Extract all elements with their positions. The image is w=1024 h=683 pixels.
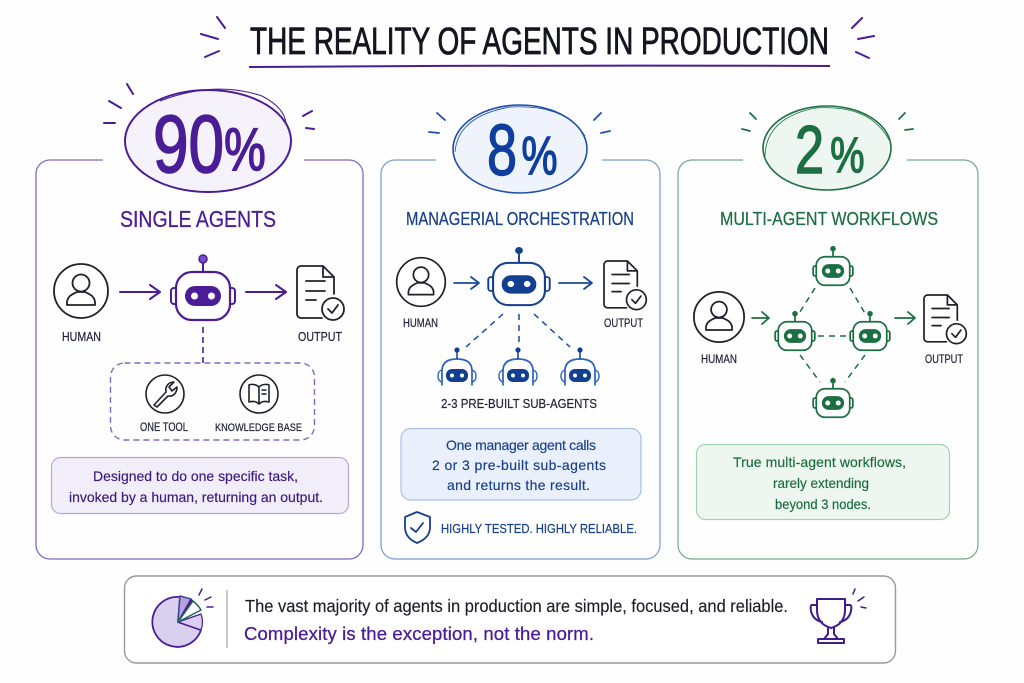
arrow [454,277,479,289]
tools group [110,363,314,440]
panel: single agents [36,84,363,559]
heading: MULTI-AGENT WORKFLOWS [720,208,938,229]
sub-agent robots [438,347,599,385]
stat: 90%: 90 [153,97,224,190]
icon: robot bottom [813,378,853,417]
icon: sub-agent 1 [438,347,476,385]
label: output: OUTPUT [298,330,342,344]
icon: trophy [811,589,866,643]
stat: 90% [125,89,291,192]
title accent ticks [201,17,874,58]
stat: 90%: % [224,116,266,183]
label: knowledge base: KNOWLEDGE BASE [215,422,302,434]
callout [696,444,950,520]
icon: robot right [850,311,890,350]
stat ticks [429,113,610,133]
divider [226,590,228,648]
title: THE REALITY OF AGENTS IN PRODUCTION [250,21,829,63]
icon: human [54,264,108,318]
arrow [559,277,592,289]
dashed connector [202,327,204,363]
icon: human [397,258,445,306]
stat: 2%: % [830,128,865,183]
icon: output document [924,295,966,344]
callout [52,458,348,514]
callout: True multi-agent workflows, [733,454,906,470]
icon: robot top [813,246,853,285]
icon: robot left [775,311,815,350]
panel: managerial orchestration [381,105,660,559]
summary emphasis: Complexity is the exception, not the norm. [244,623,594,644]
callout: beyond 3 nodes. [775,497,871,512]
reliability note: HIGHLY TESTED. HIGHLY RELIABLE. [441,521,637,536]
label: output: OUTPUT [604,318,643,330]
icon: sub-agent 2 [499,347,537,385]
callout [401,428,641,500]
arrow [895,312,915,324]
callout: 2 or 3 pre-built sub-agents [432,457,606,473]
stat: 8%: 8 [487,111,517,191]
arrow [246,285,286,299]
arrow [120,285,160,299]
stat ticks [742,113,913,131]
heading: MANAGERIAL ORCHESTRATION [406,208,634,229]
callout: One manager agent calls [446,437,596,453]
label: one tool: ONE TOOL [140,422,188,434]
robot network [775,246,890,417]
stat: 2% [763,106,891,190]
stat ticks [104,84,314,129]
stat: 8% [453,105,587,193]
icon: book [240,375,278,413]
heading: SINGLE AGENTS [120,206,276,232]
icon: output document [297,266,344,320]
icon: human [694,292,744,342]
icon: output document [604,261,646,310]
dashed network links [798,288,866,382]
callout: invoked by a human, returning an output. [69,489,323,505]
stat: 8%: % [522,126,558,186]
callout: and returns the result. [447,477,590,493]
callout: Designed to do one specific task, [93,468,298,484]
callout: rarely extending [773,476,869,491]
label: output: OUTPUT [925,354,963,366]
icon: pie chart [152,589,213,647]
icon: robot [171,255,235,320]
label: human: HUMAN [701,354,737,366]
label: human: HUMAN [403,318,438,330]
icon: wrench [146,375,184,413]
icon: shield [405,512,430,543]
arrow [752,312,769,324]
stat: 2%: 2 [795,111,824,188]
dashed connectors [466,314,570,347]
label: human: HUMAN [62,330,101,344]
panel: multi-agent workflows [678,106,978,559]
summary text: The vast majority of agents in production are simple, focused, and reliable. [245,596,788,616]
label: sub-agents: 2-3 PRE-BUILT SUB-AGENTS [441,397,597,411]
icon: sub-agent 3 [561,347,599,385]
summary banner [124,576,896,663]
icon: robot [488,247,550,305]
